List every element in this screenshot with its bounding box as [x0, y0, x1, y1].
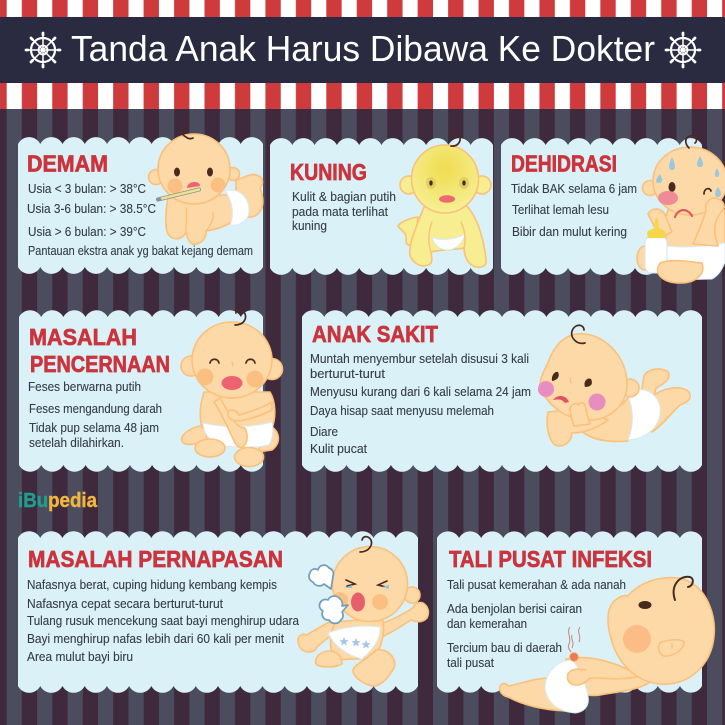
text: kuning details: kuning [292, 218, 327, 233]
panel: tali pusat infeksi [437, 531, 714, 713]
icon: jaundiced baby [398, 134, 491, 267]
text: dehidrasi details: Terlihat lemah lesu [512, 202, 609, 217]
text: demam details: Usia > 6 bulan: > 39°C [28, 224, 146, 239]
heading: masalah pencernaan: MASALAH [29, 324, 137, 350]
icon: dehydrated baby with bottle [637, 136, 725, 283]
text: pencernaan details: Feses berwarna putih [28, 379, 141, 394]
heading: tali pusat infeksi: TALI PUSAT INFEKSI [449, 546, 652, 572]
text: anak sakit details [310, 351, 531, 456]
bottom awning stripes [0, 83, 725, 109]
text: dehidrasi details: Tidak BAK selama 6 jam [511, 181, 637, 196]
text: anak sakit details: Daya hisap saat menyusu melemah [310, 403, 494, 418]
text: demam details: Pantauan ekstra anak yg bakat kejang demam [28, 243, 253, 258]
text: anak sakit details: berturut-turut [310, 366, 385, 381]
panel: anak sakit [302, 310, 702, 472]
heading: masalah pencernaan [29, 324, 170, 377]
text: tali pusat details: Tali pusat kemerahan & ada nanah [447, 577, 626, 592]
logo: ibupedia: iBupedia [18, 490, 98, 512]
heading: masalah pernapasan: MASALAH PERNAPASAN [28, 546, 283, 572]
top awning stripes [0, 0, 725, 18]
panel: masalah pernapasan [18, 531, 428, 693]
heading: dehidrasi: DEHIDRASI [511, 150, 617, 176]
text: pernapasan details: Area mulut bayi biru [27, 649, 133, 664]
text: tali pusat details [447, 577, 626, 670]
text: dehidrasi details: Bibir dan mulut kering [512, 224, 627, 239]
icon: baby lying with infected navel [500, 577, 714, 713]
icon: sad baby lying down [538, 325, 690, 446]
text: anak sakit details: Kulit pucat [310, 441, 367, 456]
text: demam details: Usia 3-6 bulan: > 38.5°C [27, 201, 156, 216]
heading: demam: DEMAM [27, 150, 108, 176]
icon: baby with thermometer [148, 126, 263, 244]
icon: crying baby with breath puffs [298, 537, 428, 686]
text: pernapasan details: Nafasnya berat, cuping hidung kembang kempis [27, 577, 277, 592]
icon: baby holding tummy [181, 309, 282, 466]
text: pernapasan details: Tulang rusuk mencekung saat bayi menghirup udara [27, 613, 300, 628]
panel: kuning [270, 134, 493, 275]
icon: ship wheel left [26, 33, 60, 67]
text: anak sakit details: Muntah menyembur setelah disusui 3 kali [310, 351, 529, 366]
text: pernapasan details: Bayi menghirup nafas lebih dari 60 kali per menit [27, 631, 284, 646]
text: tali pusat details: tali pusat [447, 655, 494, 670]
panel: demam [18, 126, 263, 274]
text: anak sakit details: Menyusu kurang dari 6 kali selama 24 jam [310, 384, 531, 399]
text: pernapasan details: Nafasnya cepat secara berturut-turut [27, 596, 223, 611]
title text: Tanda Anak Harus Dibawa Ke Dokter [71, 28, 655, 69]
panel: masalah pencernaan [19, 309, 282, 472]
text: pencernaan details: setelah dilahirkan. [29, 435, 124, 450]
icon: ship wheel right [666, 33, 700, 67]
text: pencernaan details: Feses mengandung darah [29, 401, 162, 416]
text: pernapasan details [27, 577, 300, 664]
text: pencernaan details [28, 379, 162, 450]
text: tali pusat details: Ada benjolan berisi cairan [447, 601, 582, 616]
panel: dehidrasi [501, 136, 725, 283]
text: anak sakit details: Diare [310, 424, 338, 439]
text: demam details: Usia < 3 bulan: > 38°C [28, 181, 146, 196]
text: pencernaan details: Tidak pup selama 48 jam [29, 420, 159, 435]
heading: kuning: KUNING [290, 159, 367, 185]
title banner [0, 17, 725, 83]
text: kuning details [292, 189, 396, 233]
text: kuning details: Kulit & bagian putih [292, 189, 396, 204]
text: demam details [27, 181, 253, 258]
heading: masalah pencernaan: PENCERNAAN [30, 351, 170, 377]
heading: anak sakit: ANAK SAKIT [312, 321, 439, 347]
text: tali pusat details: Tercium bau di daerah [447, 640, 562, 655]
text: dehidrasi details [511, 181, 637, 239]
text: tali pusat details: dan kemerahan [447, 616, 527, 631]
text: kuning details: pada mata terlihat [292, 204, 388, 219]
